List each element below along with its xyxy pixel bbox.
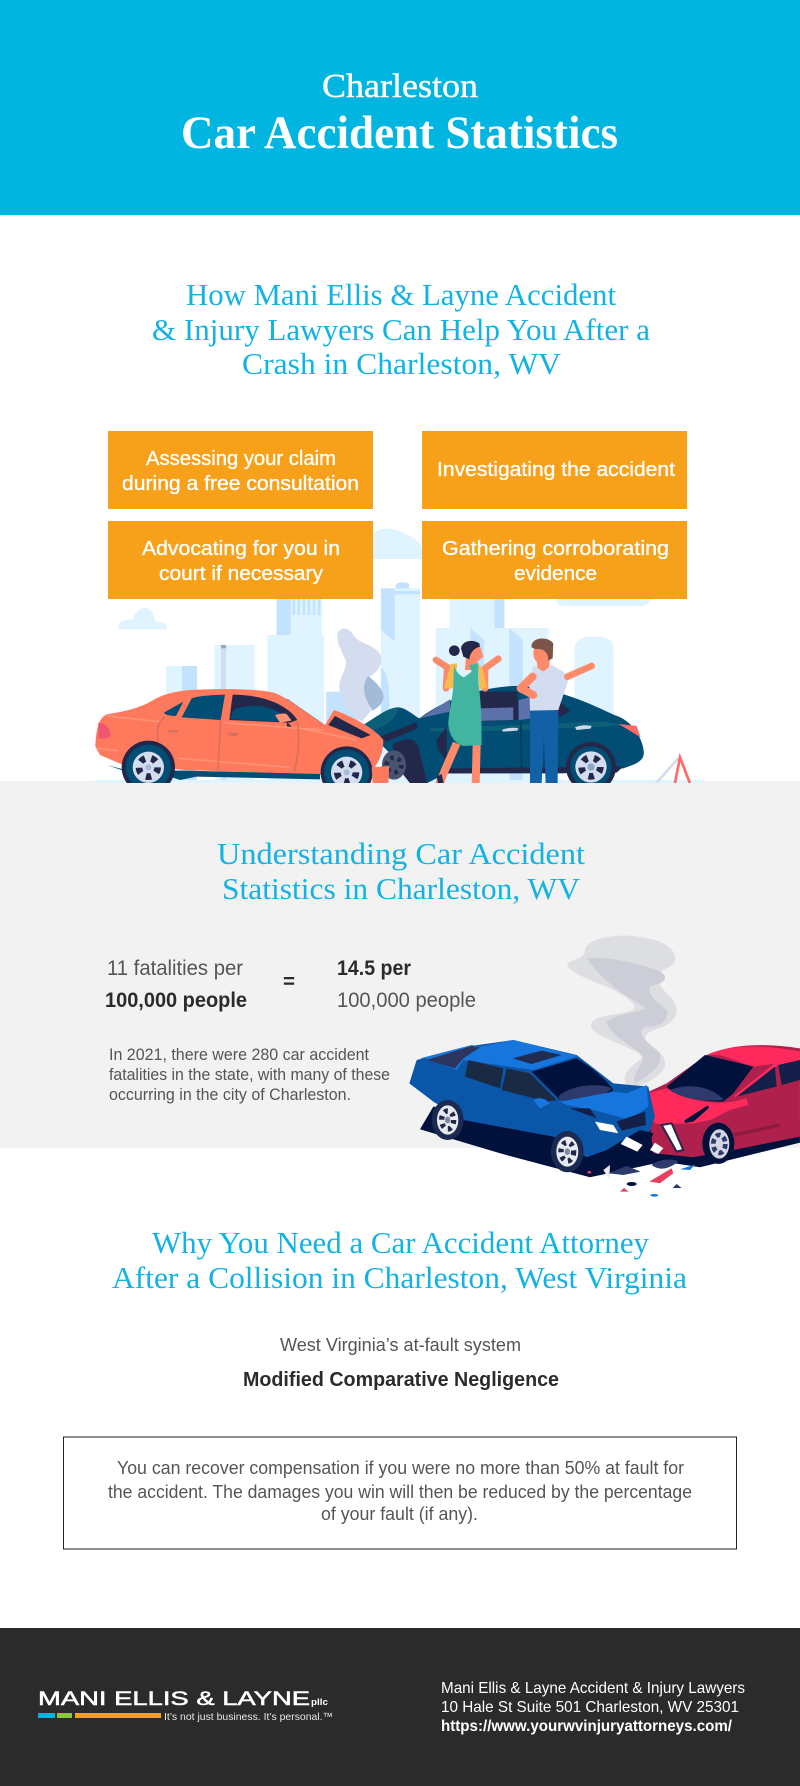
contact details: https://www.yourwvinjuryattorneys.com/ — [441, 1718, 733, 1735]
ground shadow — [420, 1107, 800, 1177]
box: advocating for you in court — [108, 521, 373, 599]
callout: negligence explanation: of your fault (if any). — [321, 1504, 478, 1524]
heading: why you need an attorney: After a Collision in Charleston, West Virginia — [112, 1260, 687, 1295]
logo: Mani Ellis & Layne: pllc — [311, 1697, 328, 1707]
statistic: comparison rate: 100,000 people — [337, 989, 476, 1012]
statistic: comparison rate: 14.5 per — [337, 957, 411, 980]
heading: understanding statistics — [217, 836, 585, 906]
box: gathering corroborating evidence: evidence — [514, 563, 597, 585]
blue pickup truck — [409, 1040, 663, 1172]
equals sign: = — [283, 971, 295, 993]
contact details: 10 Hale St Suite 501 Charleston, WV 25301 — [441, 1699, 739, 1716]
logo: Mani Ellis & Layne — [38, 1689, 333, 1723]
heading: how the firm can help: & Injury Lawyers Can Help You After a — [152, 312, 650, 347]
text block: 2021 fatalities: fatalities in the state, with many of these — [109, 1065, 390, 1084]
woman in green dress — [436, 641, 498, 785]
heading: why you need an attorney — [112, 1225, 687, 1295]
box: advocating for you in court: court if necessary — [159, 563, 323, 585]
smoke — [567, 936, 677, 1087]
title line: Car Accident Statistics: Car Accident Statistics — [181, 107, 618, 159]
logo: Mani Ellis & Layne: It’s not just business. It’s personal.™ — [164, 1711, 333, 1723]
panel: header banner — [0, 0, 800, 215]
illustration: city skyline and car crash with two people — [95, 529, 703, 798]
heading: understanding statistics: Understanding Car Accident — [217, 836, 585, 871]
orange car — [95, 689, 390, 783]
text: at-fault system: West Virginia’s at-fault system — [280, 1335, 521, 1355]
skyline buildings and clouds — [95, 529, 703, 783]
text block: 2021 fatalities — [109, 1045, 390, 1104]
crash smoke and dark blue car — [337, 628, 644, 792]
debris — [587, 1160, 695, 1197]
callout: negligence explanation: You can recover compensation if you were no more than 50% at fault for — [117, 1458, 684, 1478]
contact details: Mani Ellis & Layne Accident & Injury Lawyers — [441, 1680, 745, 1697]
heading: why you need an attorney: Why You Need a Car Accident Attorney — [152, 1225, 649, 1260]
box: gathering corroborating evidence: Gathering corroborating — [442, 538, 669, 560]
contact details — [441, 1680, 745, 1735]
box: investigating the accident — [422, 431, 687, 509]
title line: Charleston: Charleston — [322, 68, 478, 105]
box: assessing your claim — [108, 431, 373, 509]
logo: Mani Ellis & Layne: MANI ELLIS & LAYNE — [38, 1689, 310, 1710]
text block: 2021 fatalities: In 2021, there were 280 car accident — [109, 1045, 369, 1064]
heading: how the firm can help: Crash in Charleston, WV — [242, 346, 562, 381]
statistic: comparison rate — [337, 957, 476, 1012]
box: assessing your claim: Assessing your claim — [146, 448, 336, 470]
statistic: Charleston fatalities: 11 fatalities per — [107, 957, 243, 980]
callout: negligence explanation — [64, 1437, 736, 1549]
warning triangle — [656, 757, 690, 783]
man in white t-shirt — [521, 639, 592, 783]
heading: how the firm can help: How Mani Ellis & Layne Accident — [186, 277, 616, 312]
illustration: blue truck and red car collision with smoke — [409, 936, 800, 1197]
box: assessing your claim: during a free consultation — [122, 473, 359, 495]
panel: gray statistics background — [0, 781, 800, 1148]
box: investigating the accident: Investigating the accident — [437, 459, 675, 481]
statistic: Charleston fatalities: 100,000 people — [105, 989, 247, 1012]
box: gathering corroborating evidence — [422, 521, 687, 599]
panel: footer — [0, 1628, 800, 1786]
heading: understanding statistics: Statistics in Charleston, WV — [222, 871, 581, 906]
heading: how the firm can help — [152, 277, 650, 381]
statistic: Charleston fatalities — [105, 957, 247, 1012]
text block: 2021 fatalities: occurring in the city of Charleston. — [109, 1085, 351, 1104]
red car — [645, 1045, 800, 1164]
panel: service boxes — [108, 431, 687, 599]
box: advocating for you in court: Advocating for you in — [142, 538, 340, 560]
callout: negligence explanation: the accident. The damages you win will then be reduced by the percentage — [108, 1482, 692, 1502]
text: modified comparative negligence: Modified Comparative Negligence — [243, 1369, 559, 1391]
